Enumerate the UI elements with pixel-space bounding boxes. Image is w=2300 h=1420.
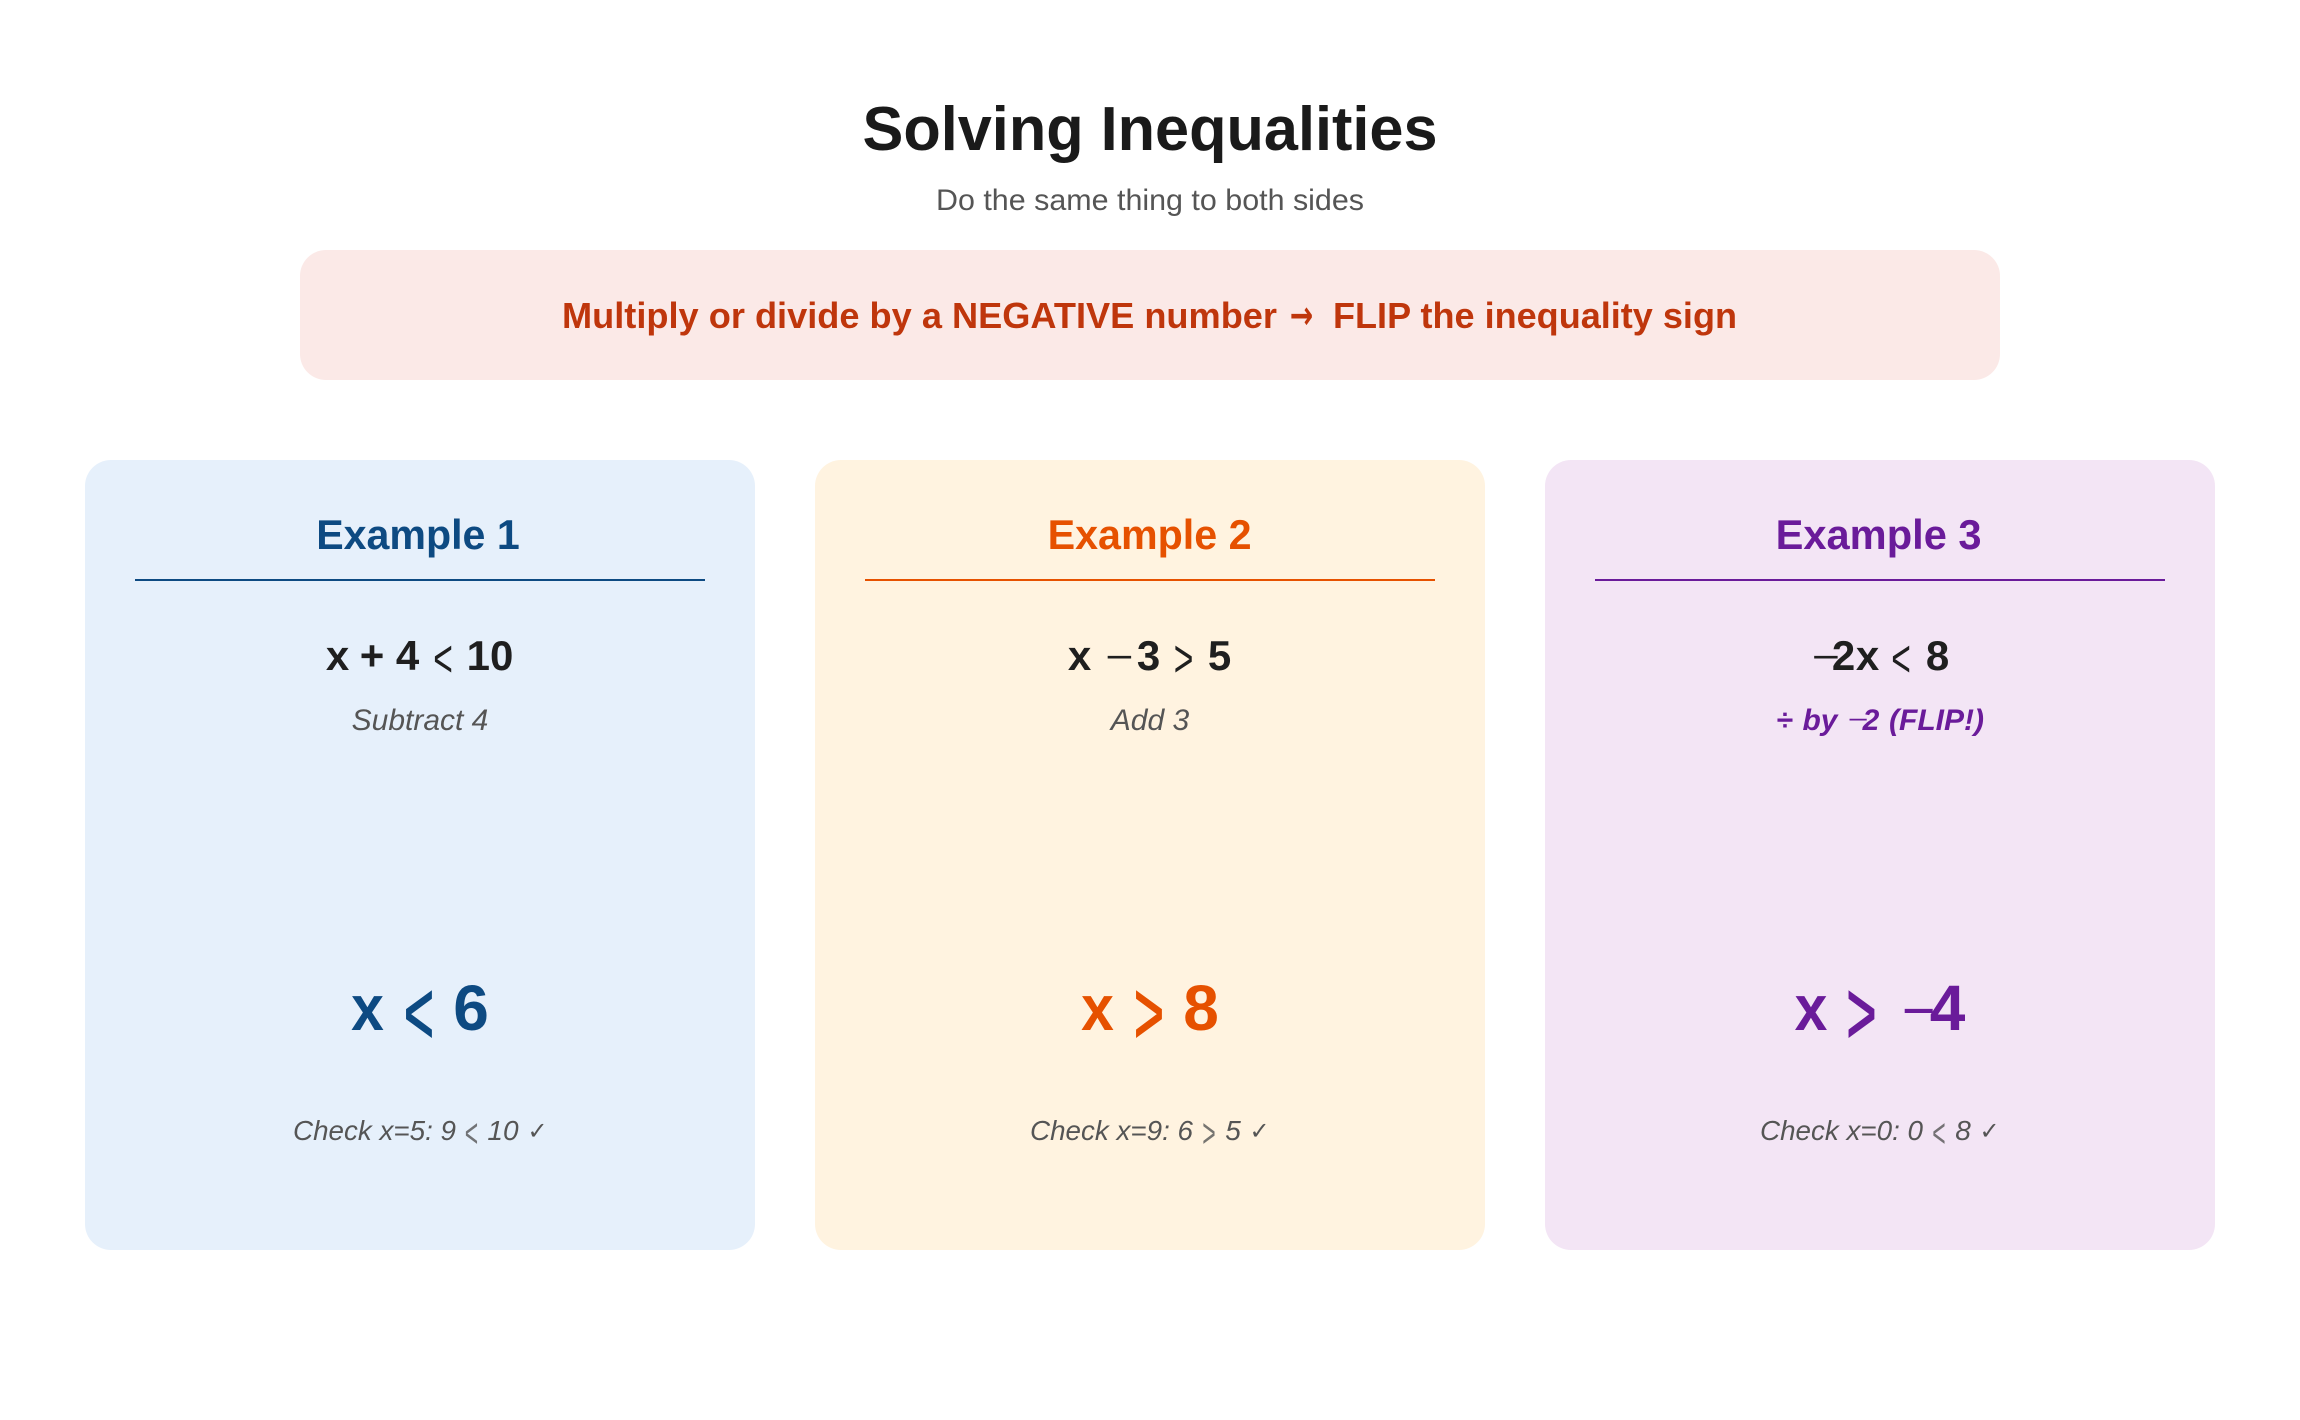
- check: example 1: Check x=5: 9: [293, 1115, 456, 1146]
- result: example 1: 6: [453, 972, 489, 1044]
- equation: example 3: 8: [1926, 632, 1949, 679]
- equation: example 1: [326, 630, 513, 688]
- result: example 2: 8: [1183, 972, 1219, 1044]
- check: example 3: <: [1932, 1110, 1946, 1156]
- panel: example 2: [815, 460, 1485, 1250]
- step: example 2: Add 3: [1109, 704, 1190, 737]
- result: example 2: [1081, 964, 1219, 1063]
- step: example 3: (FLIP!): [1889, 704, 1984, 737]
- check: example 3: ✓: [1979, 1117, 2000, 1145]
- result: example 2: >: [1134, 964, 1164, 1063]
- title: Solving Inequalities: [862, 95, 1438, 164]
- check: example 1: 10: [487, 1115, 519, 1146]
- result: example 1: <: [404, 964, 434, 1063]
- result: example 3: −: [1902, 979, 1935, 1043]
- equation: example 3: [1812, 630, 1949, 688]
- result: example 3: 4: [1930, 972, 1966, 1044]
- equation: example 1: x: [326, 632, 350, 679]
- result: example 3: [1795, 964, 1966, 1063]
- equation: example 1: <: [433, 630, 453, 688]
- equation: example 2: x: [1068, 632, 1092, 679]
- check: example 3: 8: [1955, 1115, 1971, 1146]
- equation: example 1: 4: [396, 632, 420, 679]
- equation: example 2: 5: [1208, 632, 1231, 679]
- panel: example 1: [85, 460, 755, 1250]
- result: example 1: [351, 964, 489, 1063]
- check: example 3: [1760, 1110, 2000, 1156]
- result: example 3: x: [1795, 973, 1827, 1045]
- callout: negative number rule: →: [1290, 293, 1313, 339]
- check: example 2: >: [1202, 1110, 1216, 1156]
- equation: example 3: x: [1856, 632, 1880, 679]
- result: example 3: >: [1847, 964, 1876, 1063]
- step: example 3: −: [1848, 707, 1868, 733]
- equation: example 2: 3: [1137, 632, 1160, 679]
- step: example 3: by: [1802, 704, 1839, 737]
- equation: example 3: <: [1891, 630, 1911, 688]
- check: example 1: ✓: [527, 1117, 548, 1145]
- heading: example 2: Example 2: [1048, 511, 1252, 558]
- step: example 3: 2: [1862, 704, 1880, 737]
- heading: example 3: Example 3: [1776, 511, 1982, 558]
- result: example 1: x: [351, 973, 384, 1045]
- equation: example 3: 2: [1832, 632, 1855, 679]
- callout: negative number rule: Multiply or divide by a NEGATIVE number: [562, 295, 1277, 336]
- subtitle: Do the same thing to both sides: [936, 184, 1364, 217]
- check: example 2: 5: [1225, 1115, 1241, 1146]
- step: example 3: ÷: [1777, 704, 1793, 737]
- check: example 2: [1030, 1110, 1270, 1156]
- step: example 3: [1777, 704, 1984, 737]
- equation: example 2: −: [1105, 637, 1134, 677]
- panel: example 3: [1545, 460, 2215, 1250]
- check: example 1: [293, 1110, 548, 1156]
- step: example 1: Subtract 4: [352, 704, 488, 737]
- check: example 2: ✓: [1249, 1117, 1270, 1145]
- equation: example 1: 10: [467, 632, 513, 679]
- callout: negative number rule: [300, 250, 2000, 380]
- equation: example 2: [1068, 630, 1231, 688]
- equation: example 1: +: [360, 632, 384, 679]
- callout: negative number rule: FLIP the inequality sign: [1333, 295, 1737, 336]
- check: example 2: Check x=9: 6: [1030, 1115, 1193, 1146]
- heading: example 1: Example 1: [316, 511, 520, 558]
- check: example 1: <: [465, 1110, 478, 1156]
- equation: example 3: −: [1812, 637, 1840, 677]
- equation: example 2: >: [1174, 630, 1193, 688]
- check: example 3: Check x=0: 0: [1760, 1115, 1923, 1146]
- result: example 2: x: [1081, 973, 1114, 1045]
